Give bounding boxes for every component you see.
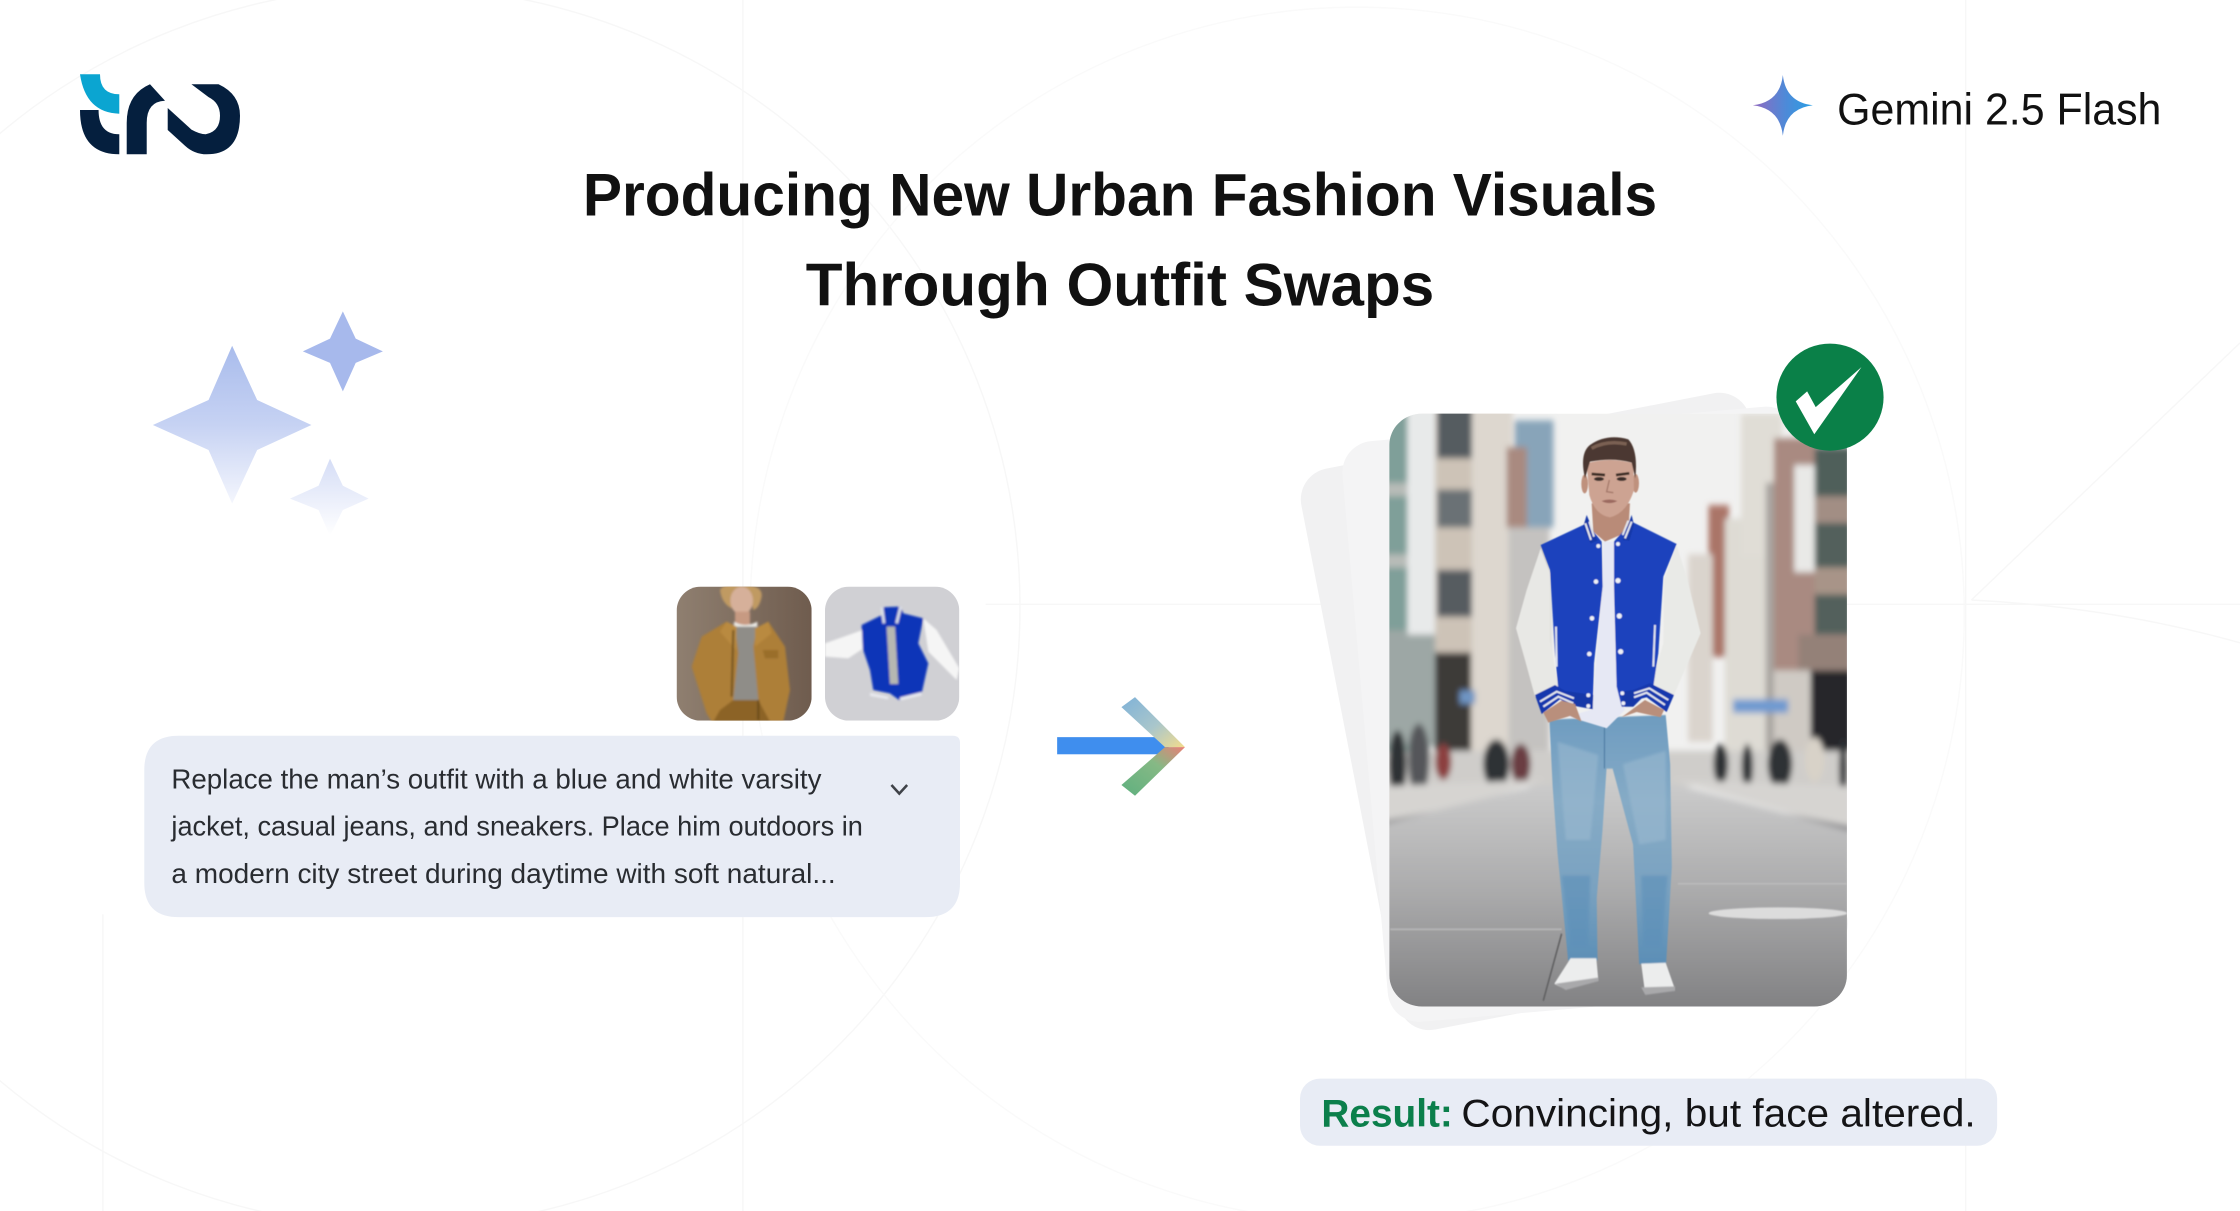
cuffs [1535,685,1575,714]
head [1581,475,1588,493]
person: legs [1549,715,1675,995]
prompt bubble [144,736,960,917]
prompt text [170,764,863,889]
result photo: man in varsity jacket on city street [1382,407,1855,1014]
icon: expand chevron [891,785,907,794]
stacked back cards [1295,387,1853,1036]
neck [1592,503,1630,542]
arrow [1057,697,1185,796]
title: Through Outfit Swaps [806,252,1434,319]
model name: Gemini 2.5 Flash [1837,85,2161,134]
title: Producing New Urban Fashion Visuals [583,162,1657,229]
hands [1543,701,1582,723]
photo backdrop: blurred street [1382,407,1855,1014]
logo: tru mark [80,74,240,154]
icon: decorative sparkles [153,311,383,536]
title [583,162,1657,319]
input image: varsity jacket [825,587,959,721]
check badge [1776,344,1884,451]
prompt text: a modern city street during daytime with soft natural... [171,858,836,889]
road marks [1390,884,1847,1001]
prompt text: Replace the man’s outfit with a blue and white varsity [171,764,821,795]
snaps [1586,542,1625,708]
prompt text: jacket, casual jeans, and sneakers. Place him outdoors in [170,811,863,842]
brand: Gemini 2.5 Flash [1753,75,2161,136]
person: upper body [1516,437,1701,728]
sleeves [1516,548,1558,697]
result caption: Result: [1321,1091,1453,1135]
jacket [1541,523,1603,709]
result caption [1300,1079,1997,1146]
icon: Gemini star [1753,75,1813,136]
result caption: Convincing, but face altered. [1461,1091,1976,1135]
input image: man in tan jacket [677,585,812,722]
t-shirt [1568,542,1625,728]
